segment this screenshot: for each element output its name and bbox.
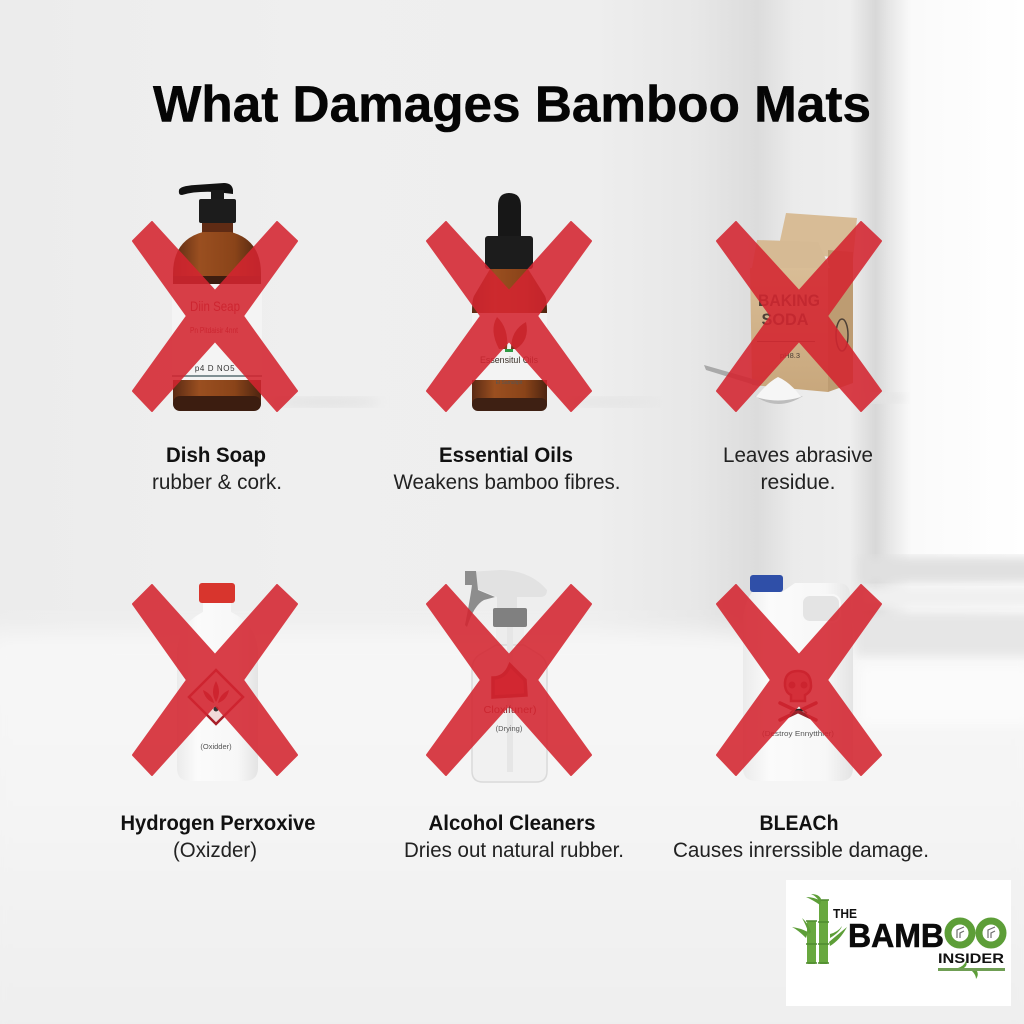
description: hydrogen peroxide: (Oxizder) [173,839,257,862]
bamboo underline with leaves [938,961,1005,979]
label: dish soap: Dish Soap [166,444,266,467]
icon: spray bottle: Cloxifuner) [484,704,536,716]
red cross [133,222,297,411]
icon: baking soda box and scoop [704,213,857,404]
icon: baking soda box and scoop: BAKING [758,291,820,310]
icon: dish soap pump bottle: p4 D NO5 [195,364,235,373]
label: bleach: BLEACh [760,812,838,835]
red cross [717,222,881,411]
icon: dropper bottle [472,193,547,411]
description: baking soda: Leaves abrasive [723,444,873,467]
icon: hydrogen peroxide bottle: (Oxidder) [200,742,232,751]
icon: bamboo ring letters [948,921,1003,945]
item: baking soda [704,213,881,494]
logo text: bamboo: BAMB [848,917,944,954]
label: essential oils: Essential Oils [439,444,573,467]
icon: baking soda box and scoop: pH8.3 [780,351,800,360]
title: What Damages Bamboo Mats [153,76,871,132]
red cross [133,585,297,775]
label: hydrogen peroxide: Hydrogen Perxoxive [120,812,316,835]
description: bleach: Causes inrerssible damage. [673,839,929,862]
description: essential oils: Weakens bamboo fibres. [394,471,620,494]
description: baking soda line two: residue. [760,471,836,494]
icon: baking soda box and scoop: SODA [762,310,808,329]
logo text: the: THE [833,906,857,921]
description: alcohol cleaners: Dries out natural rubber. [404,839,624,862]
description: dish soap: rubber & cork. [152,471,282,494]
icon: dish soap pump bottle: Diin Seap [190,298,240,314]
red cross [427,585,591,775]
red cross [717,585,881,775]
logo: the bamboo insider [786,880,1011,1006]
item: bleach [673,575,929,862]
logo text: insider: INSIDER [938,950,1004,966]
icon: spray bottle: (Drying) [496,724,523,733]
icon: dish soap pump bottle: Pn Pitdaisir 4nnt [190,326,239,335]
label: alcohol cleaners: Alcohol Cleaners [428,812,596,835]
icon: hydrogen peroxide bottle [177,583,258,781]
item: dish soap [133,183,297,494]
red cross [427,222,591,411]
item: alcohol cleaners [404,570,624,862]
icon: bleach jug [743,575,853,781]
icon: dish soap pump bottle [172,183,262,411]
icon: dropper bottle: El Samultpit [496,380,523,386]
item: essential oils [394,193,620,494]
icon: bleach jug: (Destroy Ennytthier) [762,729,835,738]
item: hydrogen peroxide [120,583,316,862]
icon: spray bottle [465,570,547,782]
icon: bamboo stalks [792,894,847,964]
icon: dropper bottle: Essensitul Oils [480,355,538,365]
